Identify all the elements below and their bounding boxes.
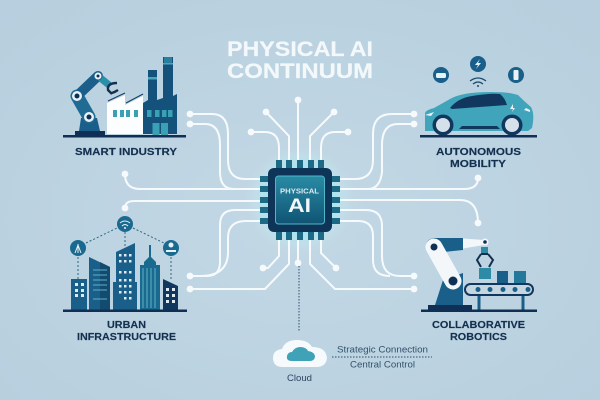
label: SMART INDUSTRY <box>75 146 177 158</box>
callout: strategic connection: Central Control <box>350 360 415 370</box>
AI chip: AI <box>288 195 311 217</box>
AI chip <box>260 160 340 240</box>
panel: autonomous mobility <box>420 56 537 170</box>
icon: buildings <box>71 243 178 310</box>
trace end dots <box>122 97 481 292</box>
icon: conveyor <box>465 268 533 310</box>
label <box>77 319 176 343</box>
circuit traces <box>125 100 478 289</box>
title <box>227 38 373 83</box>
label: MOBILITY <box>450 158 506 170</box>
label <box>436 146 521 170</box>
dotted connection to cloud <box>298 266 300 331</box>
icon: cloud <box>273 340 327 367</box>
icon: robot arm <box>72 72 118 135</box>
label: ROBOTICS <box>450 331 507 343</box>
title: CONTINUUM <box>227 60 373 83</box>
AI chip: PHYSICAL <box>280 188 320 196</box>
callout: strategic connection: Strategic Connection <box>337 344 428 356</box>
panel: urban infrastructure <box>63 216 187 343</box>
panel: collaborative robotics <box>421 238 537 343</box>
network icons <box>70 216 179 280</box>
label: URBAN <box>107 319 146 331</box>
ground line <box>420 135 537 138</box>
callout: strategic connection <box>332 344 432 370</box>
cloud label: Cloud <box>287 373 312 384</box>
icons: status <box>433 56 524 87</box>
panel: smart industry <box>63 57 186 158</box>
title: PHYSICAL AI <box>227 38 373 61</box>
ground line <box>421 310 537 312</box>
label: INFRASTRUCTURE <box>77 331 176 343</box>
label <box>432 319 525 343</box>
chip glow <box>244 144 356 256</box>
ground line <box>63 135 186 138</box>
ground line <box>63 310 187 312</box>
label: COLLABORATIVE <box>432 319 525 331</box>
label: AUTONOMOUS <box>436 146 521 158</box>
icon: factory <box>107 57 177 135</box>
icon: car <box>425 92 533 136</box>
icon: robot arm <box>426 238 493 310</box>
